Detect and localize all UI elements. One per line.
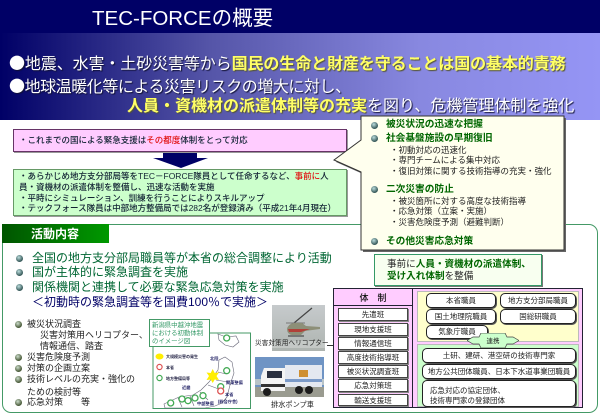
message 1: ●地震、水害・土砂災害等から国民の生命と財産を守ることは国の基本的責務 — [9, 50, 566, 74]
team: 輸送支援班 — [354, 396, 392, 405]
team list — [338, 308, 409, 407]
message 2: ●地球温暖化等による災害リスクの増大に対し、 — [9, 73, 351, 97]
team: 応急対策班 — [354, 381, 392, 390]
team — [338, 394, 408, 406]
task dot — [15, 376, 22, 383]
helicopter caption: 災害対策用ヘリコプター — [255, 340, 329, 347]
map legend: 地方整備局等 — [166, 375, 190, 381]
map region labels: 中部整備 — [197, 400, 215, 407]
divider — [412, 289, 413, 407]
link: coordination — [467, 333, 519, 348]
map region labels: (総合庁舎) — [218, 398, 238, 405]
team — [338, 337, 408, 350]
title: TEC-FORCEの概要 — [92, 7, 273, 30]
activity bullets — [16, 251, 332, 309]
map of Japan — [149, 319, 251, 409]
map legend: 大規模災害の発生 — [166, 353, 198, 359]
new support text: ・平時にシミュレーション、訓練を行うことによりスキルアップ — [19, 193, 264, 203]
bullet dot — [16, 269, 23, 276]
team: 高度技術指導班 — [347, 353, 399, 362]
role 3: 二次災害の防止 — [386, 184, 454, 195]
task 2: 災害危険度予測 — [27, 352, 90, 362]
bullet dot — [16, 255, 23, 262]
task 4: 技術レベルの充実・強化の — [27, 374, 135, 384]
staff: 国土地理院職員 — [435, 312, 487, 321]
task dot — [15, 354, 22, 361]
headline band with key messages — [0, 33, 600, 120]
truck caption: 排水ポンプ車 — [271, 400, 314, 409]
staff: 本省職員 — [446, 296, 476, 305]
team: 被災状況調査班 — [347, 367, 399, 376]
new support text — [19, 171, 336, 213]
task 4: ための検討等 — [27, 387, 81, 397]
role 2 details: ・復旧対策に関する技術指導の充実・強化 — [390, 166, 552, 176]
staff — [426, 325, 488, 339]
link: coordination: 連携 — [486, 336, 500, 345]
new support text: 員・資機材の派遣体制を整備し、迅速な活動を実施 — [19, 182, 215, 192]
new support text: ・テックフォース隊員は中部地方整備局では282名が登録済み（平成21年4月現在） — [19, 203, 336, 213]
role 3 details: ・災害危険度予測（避難判断） — [390, 217, 509, 227]
panel: activities — [2, 224, 598, 413]
task 3: 対策の企画立案 — [27, 363, 90, 373]
external experts group — [417, 344, 579, 407]
team — [338, 308, 408, 321]
agreement organizations — [422, 380, 576, 407]
task 4 — [27, 374, 135, 397]
agreement organizations: 応急対応の協定団体、 — [430, 386, 505, 395]
panel: new support — [13, 169, 347, 216]
role 3 details — [390, 196, 526, 227]
bullet dot — [371, 135, 378, 142]
photo: pump truck — [255, 357, 324, 397]
role 4: その他災害応急対策 — [386, 236, 473, 247]
bullet dot — [16, 284, 23, 291]
task list — [15, 319, 148, 407]
experts: 地方公共団体職員、日本下水道事業団職員 — [428, 367, 570, 376]
map legend: 本省 — [166, 364, 174, 370]
staff: 国総研職員 — [519, 312, 557, 321]
header band: title — [0, 0, 600, 38]
role 2 details: ・専門チームによる集中対応 — [390, 155, 500, 165]
team — [338, 351, 408, 364]
caption leader line — [327, 345, 334, 346]
staff: 地方支分部局職員 — [508, 296, 568, 305]
bullet dot — [371, 122, 378, 129]
advance preparation text: 事前に人員・資機材の派遣体制、 — [387, 259, 531, 270]
team — [338, 323, 408, 336]
team — [338, 379, 408, 392]
map legend — [150, 320, 210, 381]
staff — [500, 309, 576, 324]
map region labels: 本省 — [225, 391, 234, 398]
experts — [422, 348, 576, 363]
experts: 土研、建研、港空研の技術専門家 — [443, 351, 555, 360]
bullet 1: 全国の地方支分部局職員等が本省の総合調整により活動 — [32, 251, 332, 265]
organization header: 体 制 — [359, 293, 386, 303]
government staff group — [417, 291, 579, 342]
bullet dot — [371, 186, 378, 193]
experts — [422, 364, 576, 379]
role 2 details — [390, 145, 552, 176]
map region labels — [182, 355, 244, 407]
map markers — [168, 335, 230, 406]
staff — [500, 293, 576, 308]
role 3 details: ・応急対策（立案・実施） — [390, 206, 492, 216]
task dot — [15, 365, 22, 372]
map legend: における初動体制 — [152, 328, 203, 337]
advance preparation text: 受け入れ体制を整備 — [387, 271, 473, 282]
task dot — [15, 399, 22, 406]
task 1 detail: 災害対策用ヘリコプター、 — [40, 330, 148, 340]
bullet dot — [371, 238, 378, 245]
role 2: 社会基盤施設の早期復旧 — [386, 133, 493, 144]
team: 先遣班 — [362, 310, 384, 319]
advance preparation text — [387, 258, 531, 282]
message 3: 人員・資機材の派遣体制等の充実を図り、危機管理体制を強化 — [127, 98, 574, 115]
task dot — [15, 321, 22, 328]
task 1 detail: 情報通信、踏査 — [40, 341, 103, 351]
team: 情報通信班 — [354, 339, 392, 348]
arrow: down — [153, 153, 208, 168]
agreement organizations: 技術専門家の登録団体 — [430, 396, 505, 405]
staff: 気象庁職員 — [438, 327, 476, 336]
new support text: ・あらかじめ地方支分部局等をTEC－FORCE隊員として任命するなど、事前に人 — [19, 171, 329, 181]
activities tab: 活動内容 — [31, 227, 79, 241]
map region labels: 近畿 — [182, 384, 191, 391]
team: 現地支援班 — [354, 325, 392, 334]
role 3 details: ・被災箇所に対する高度な技術指導 — [390, 196, 526, 206]
team — [338, 365, 408, 378]
photo: helicopter — [272, 305, 325, 351]
divider — [334, 305, 412, 306]
bullet 2: 国が主体的に緊急調査を実施 — [32, 265, 188, 279]
map region labels: 北陸 — [210, 355, 219, 362]
map legend: 新潟県中越沖地震 — [152, 320, 204, 329]
bullet 4: ＜初動時の緊急調査等を国費100％で実施＞ — [32, 295, 268, 309]
callout: roles — [333, 116, 566, 252]
staff — [426, 309, 496, 324]
task 5: 応急対策 等 — [27, 397, 90, 407]
map region labels: 関東整備 — [226, 379, 244, 386]
map legend: のイメージ図 — [152, 337, 190, 345]
task 1: 被災状況調査 — [27, 319, 81, 329]
past support text: ・これまでの国による緊急支援はその都度体制をとって対応 — [19, 135, 248, 145]
panel: past support — [13, 129, 347, 152]
role 1: 被災状況の迅速な把握 — [386, 119, 483, 130]
callout: advance preparation — [374, 254, 542, 286]
activities tab — [2, 224, 109, 243]
staff — [426, 293, 496, 308]
role 2 details: ・初動対応の迅速化 — [390, 145, 467, 155]
callout text — [371, 118, 552, 247]
panel: organization — [333, 288, 583, 408]
bullet 3: 関係機関と連携して必要な緊急応急対策を実施 — [32, 280, 284, 294]
